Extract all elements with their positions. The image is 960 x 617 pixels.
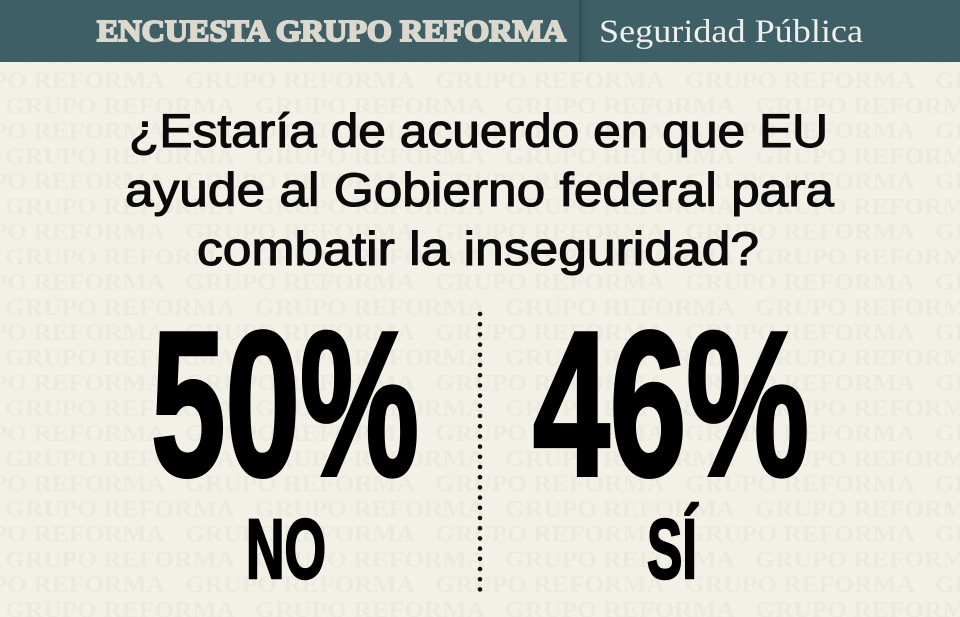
header title: ENCUESTA GRUPO REFORMA [97, 13, 567, 48]
question heading: combatir la inseguridad? [197, 222, 759, 275]
label si: SÍ [647, 502, 699, 596]
label no: NO [246, 502, 326, 596]
percentage 50: 50% [151, 289, 419, 519]
header section name: Seguridad Pública [599, 14, 863, 50]
header bar [0, 0, 960, 62]
question heading: ¿Estaría de acuerdo en que EU [129, 104, 828, 157]
percentage 46: 46% [533, 289, 809, 519]
question heading: ayude al Gobierno federal para [125, 163, 835, 216]
result: si [533, 289, 809, 596]
result: no [151, 289, 419, 596]
dotted divider [478, 314, 482, 594]
question heading [125, 104, 835, 275]
